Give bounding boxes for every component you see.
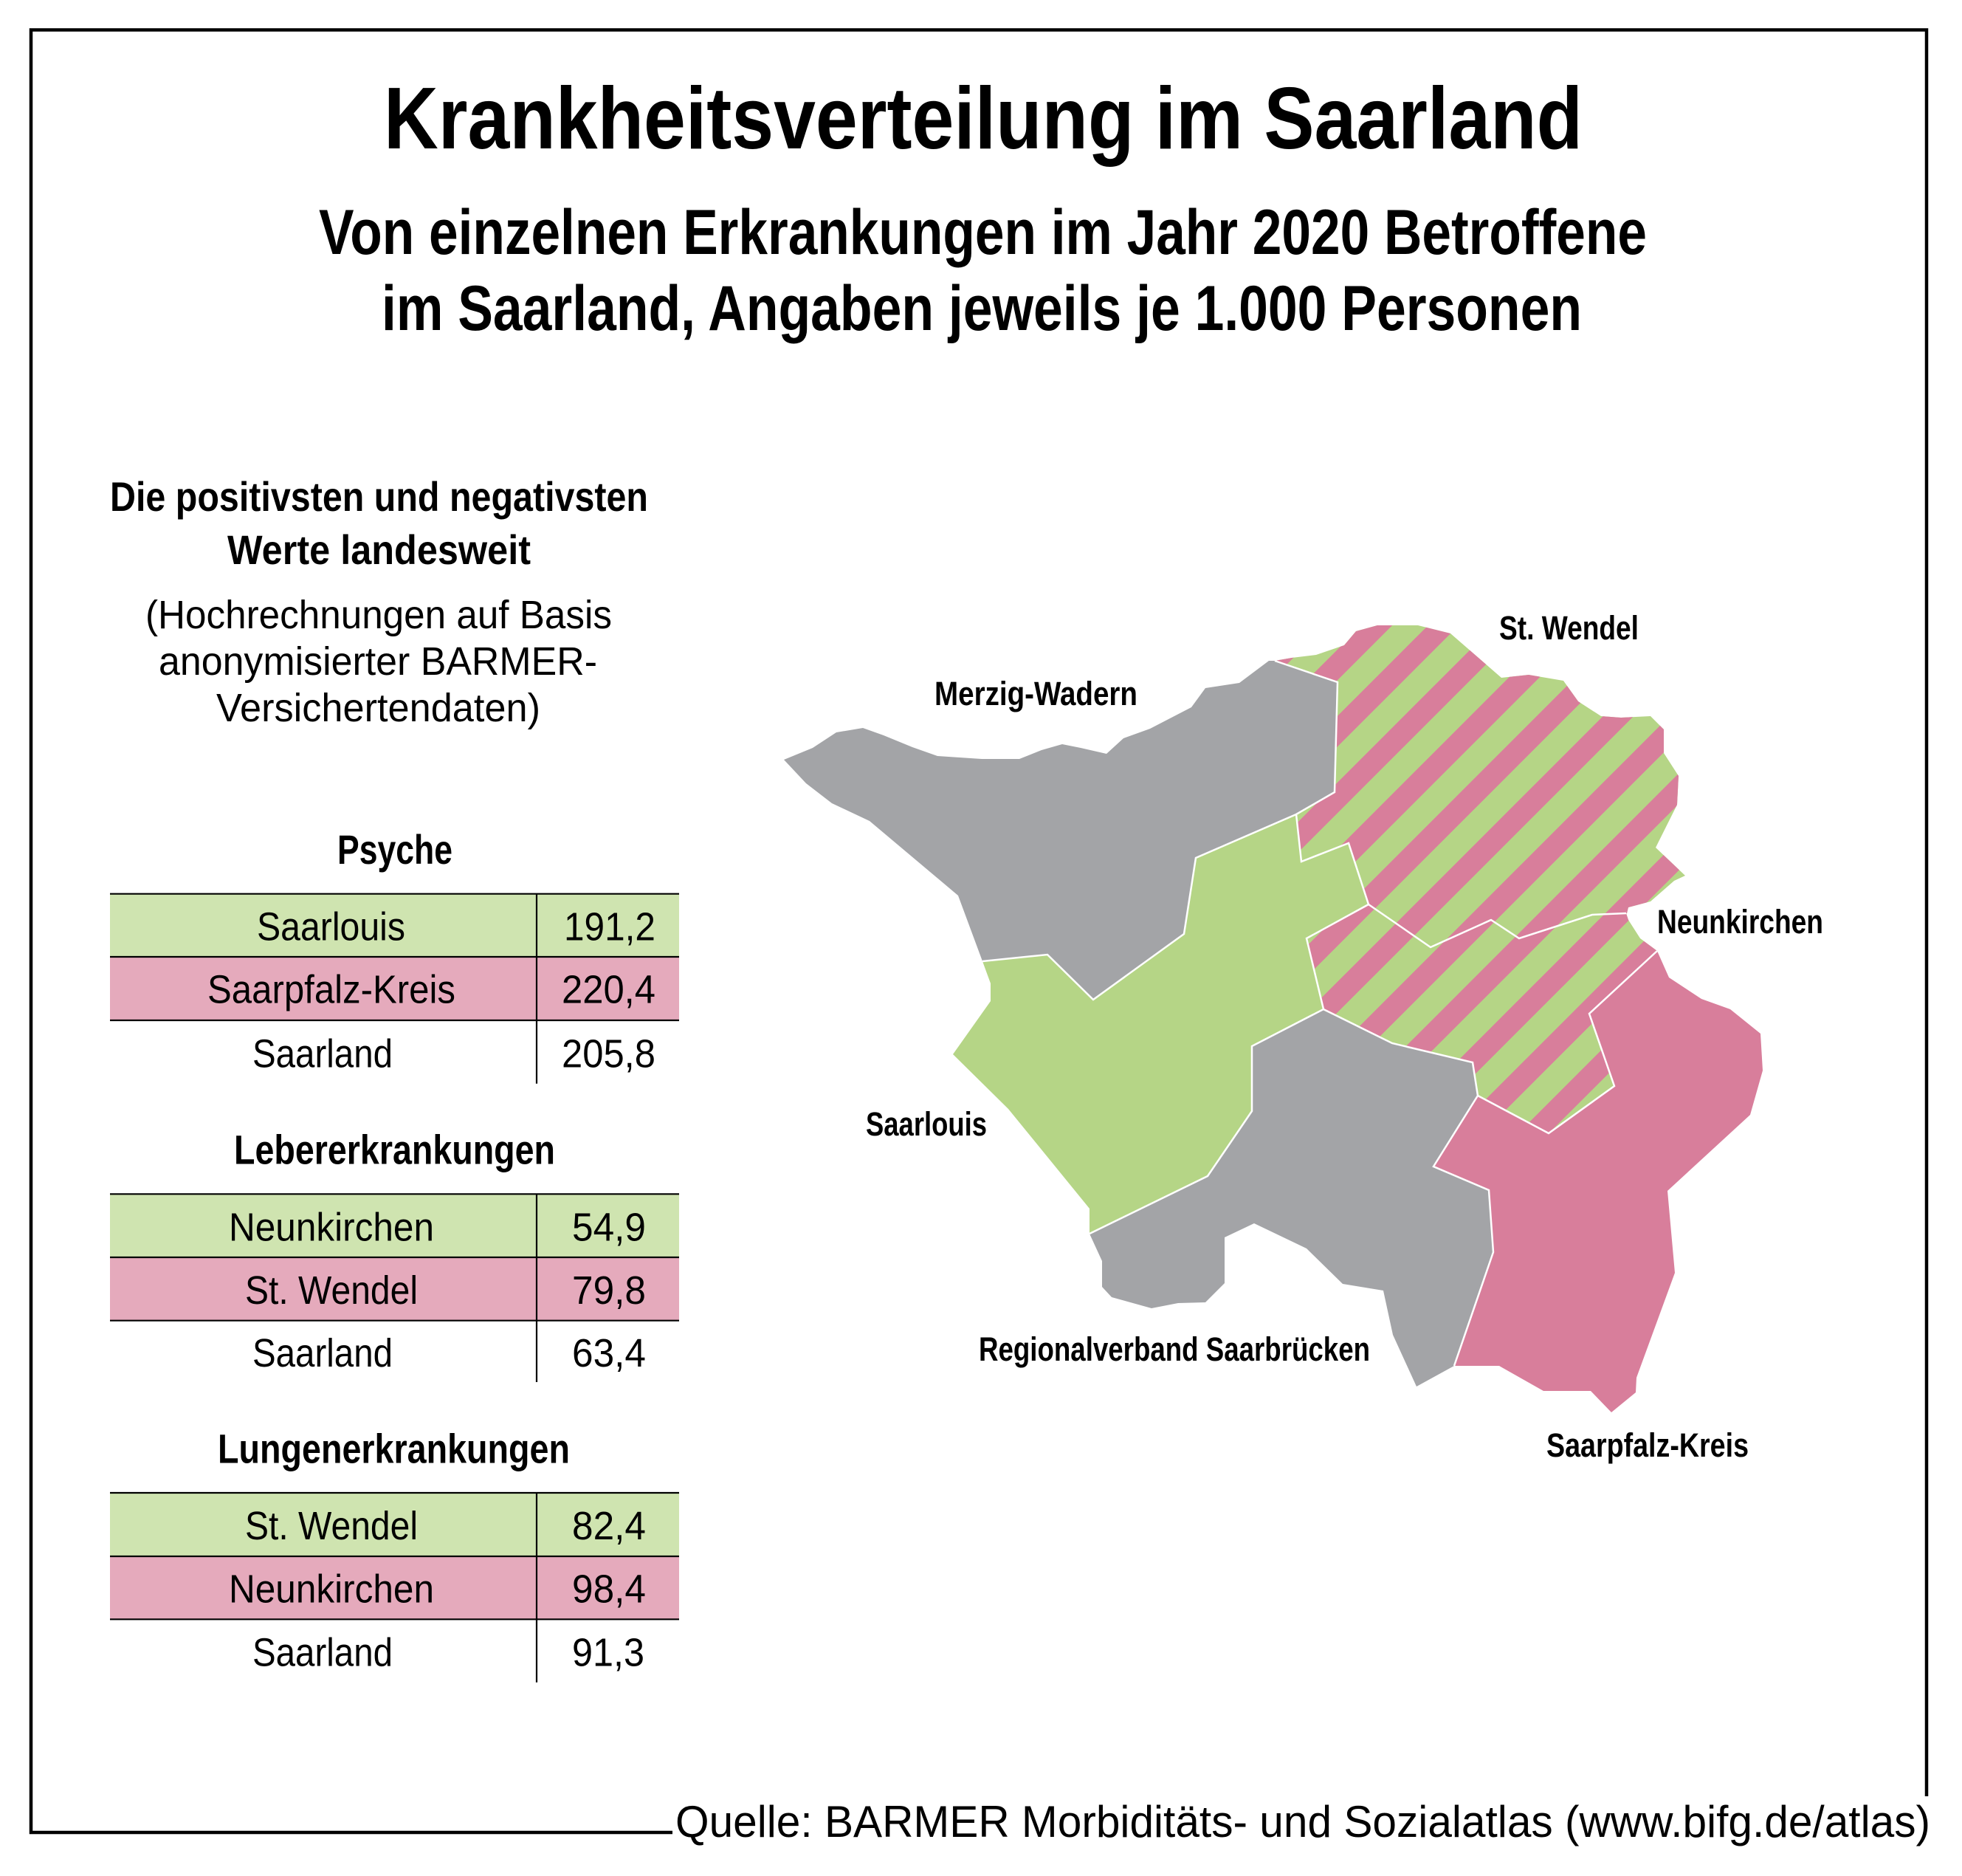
- values: 82,4: [572, 1504, 646, 1548]
- district: Saarpfalz-Kreis: [1433, 951, 1763, 1412]
- district labels: [866, 609, 1823, 1464]
- subtitle: [319, 197, 1647, 344]
- row: best value: [110, 1493, 679, 1556]
- district labels: St. Wendel: [1499, 609, 1639, 647]
- district labels: Saarlouis: [866, 1105, 987, 1143]
- panel: Psyche table: [110, 826, 679, 1084]
- values: [229, 1504, 646, 1675]
- values: Neunkirchen: [229, 1206, 434, 1250]
- values: [207, 905, 655, 1076]
- panel: Lebererkrankungen table: [110, 1127, 679, 1382]
- table rules: [110, 1194, 679, 1382]
- values: 54,9: [572, 1206, 646, 1250]
- values: Saarlouis: [257, 905, 405, 949]
- row: best value: [110, 1194, 679, 1257]
- row: worst value: [110, 957, 679, 1020]
- heading: Lebererkrankungen: Lebererkrankungen: [234, 1127, 555, 1173]
- row: best value: [110, 894, 679, 957]
- values: Neunkirchen: [229, 1567, 434, 1612]
- left panel intro heading: Die positivsten und negativsten: [110, 473, 648, 520]
- row: worst value: [110, 1556, 679, 1619]
- values: 98,4: [572, 1567, 646, 1612]
- table rules: [110, 1493, 679, 1683]
- map of Saarland districts: [784, 625, 1763, 1412]
- district: Saarlouis: [953, 814, 1369, 1234]
- district: Merzig-Wadern: [784, 661, 1338, 1000]
- subtitle: Von einzelnen Erkrankungen im Jahr 2020 Betroffene: [319, 197, 1647, 268]
- title: Krankheitsverteilung im Saarland: [384, 69, 1583, 168]
- district: Regionalverband Saarbrücken: [1090, 1010, 1493, 1387]
- source line: Quelle: BARMER Morbiditäts- und Sozialatlas (www.bifg.de/atlas): [675, 1797, 1930, 1846]
- district labels: Regionalverband Saarbrücken: [979, 1330, 1370, 1368]
- district labels: Merzig-Wadern: [934, 675, 1137, 712]
- methodology note: Versichertendaten): [216, 686, 540, 730]
- district borders: [982, 661, 1657, 1366]
- values: St. Wendel: [245, 1268, 418, 1313]
- left panel intro heading: [110, 473, 648, 573]
- values: Saarland: [252, 1032, 393, 1076]
- methodology note: anonymisierter BARMER-: [159, 639, 597, 684]
- methodology note: (Hochrechnungen auf Basis: [145, 593, 612, 637]
- district labels: Saarpfalz-Kreis: [1546, 1426, 1749, 1464]
- values: 91,3: [572, 1631, 644, 1675]
- values: St. Wendel: [245, 1504, 418, 1548]
- values: Saarpfalz-Kreis: [207, 967, 455, 1011]
- panel: Lungenerkrankungen table: [110, 1426, 679, 1683]
- values: 220,4: [562, 967, 655, 1011]
- district: Neunkirchen (striped): [1308, 905, 1657, 1133]
- values: 63,4: [572, 1331, 646, 1375]
- values: Saarland: [252, 1331, 393, 1375]
- heading: Lungenerkrankungen: Lungenerkrankungen: [218, 1426, 570, 1472]
- values: [229, 1206, 646, 1375]
- values: 79,8: [572, 1268, 646, 1313]
- district labels: Neunkirchen: [1657, 903, 1823, 941]
- heading: Psyche: Psyche: [337, 826, 452, 873]
- values: 191,2: [564, 905, 655, 949]
- left panel intro heading: Werte landesweit: [227, 526, 531, 573]
- subtitle: im Saarland, Angaben jeweils je 1.000 Personen: [382, 273, 1582, 344]
- table rules: [110, 894, 679, 1084]
- district: St. Wendel (striped): [1277, 625, 1685, 946]
- values: Saarland: [252, 1631, 393, 1675]
- methodology note: [145, 593, 612, 730]
- row: worst value: [110, 1257, 679, 1321]
- values: 205,8: [562, 1032, 655, 1076]
